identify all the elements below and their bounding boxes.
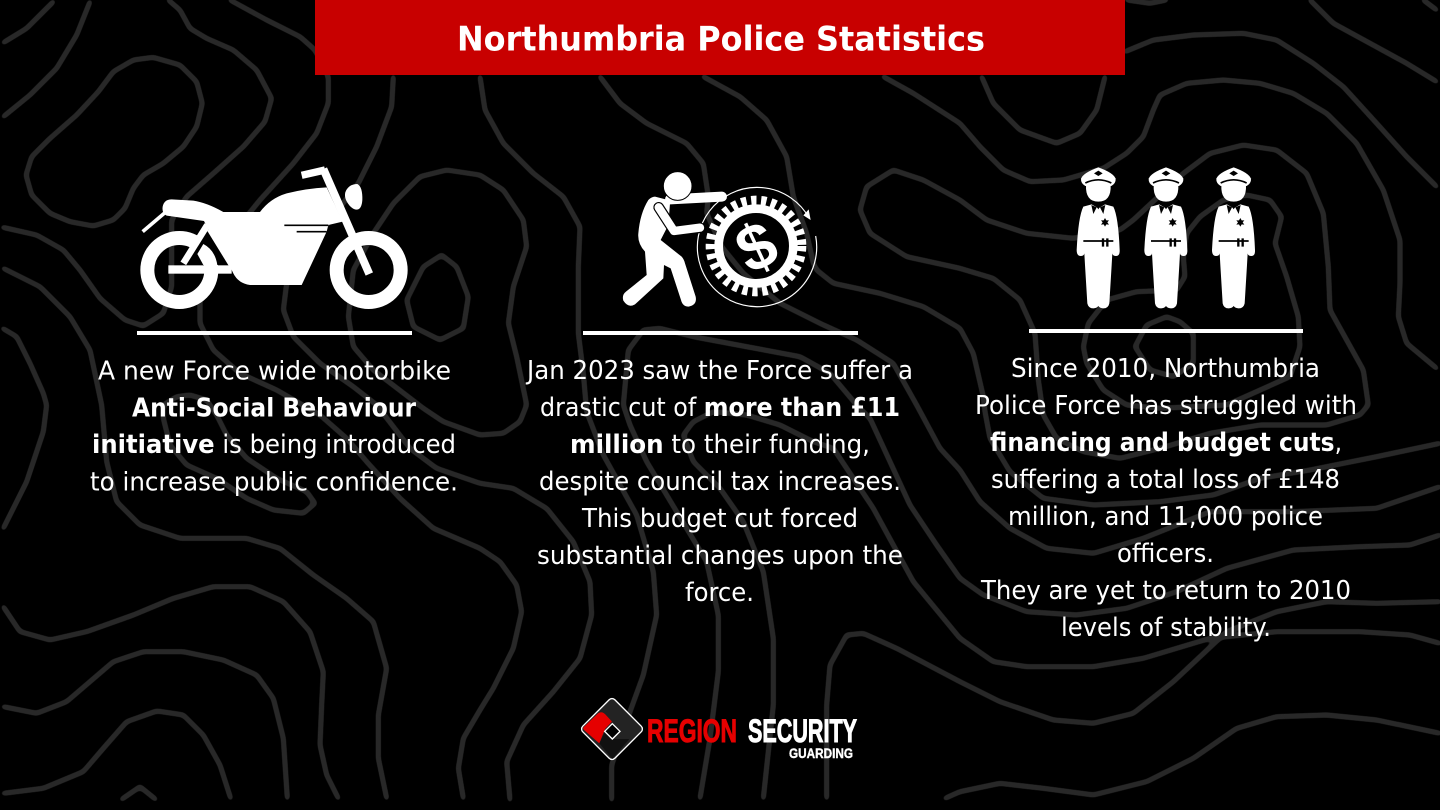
logo wordmark: SECURITY: [748, 713, 857, 749]
text block: column 3: Police Force has struggled with: [975, 391, 1357, 421]
text block: column 3: million, and 11,000 police: [1008, 502, 1323, 532]
text block: column 1: Anti-Social Behaviour: [132, 394, 416, 424]
text block: column 2: million to their funding,: [570, 430, 870, 460]
logo wordmark: GUARDING: [789, 745, 853, 761]
text block: column 2: force.: [685, 578, 754, 608]
logo wordmark: [647, 713, 857, 761]
logo wordmark: REGION: [647, 713, 737, 749]
arrowhead: [803, 209, 811, 220]
text block: column 3: Since 2010, Northumbria: [1011, 354, 1320, 384]
icon: three police officers: [1077, 167, 1255, 308]
icon: person pushing dollar gear: [623, 172, 817, 307]
divider: column 2: [583, 331, 858, 335]
text block: column 3: They are yet to return to 2010: [980, 576, 1351, 606]
text block: column 1: A new Force wide motorbike: [98, 356, 451, 386]
text block: column 1: initiative is being introduced: [92, 430, 456, 460]
divider: column 3: [1029, 329, 1303, 333]
text block: column 2: drastic cut of more than £11: [540, 393, 900, 423]
gear: [697, 187, 817, 307]
title banner: [315, 0, 1125, 75]
icon: motorbike: [143, 169, 401, 302]
text block: column 2: Jan 2023 saw the Force suffer a: [525, 356, 913, 386]
text block: column 1: [90, 356, 458, 498]
dollar sign: $: [725, 206, 788, 287]
logo: Region Security Guarding: [580, 697, 857, 761]
text block: column 3: suffering a total loss of £148: [991, 465, 1340, 495]
text block: column 3: officers.: [1117, 539, 1214, 569]
logo mark: [580, 697, 644, 761]
title text: Northumbria Police Statistics: [457, 20, 985, 58]
text block: column 3: financing and budget cuts,: [990, 428, 1342, 458]
text block: column 2: substantial changes upon the: [537, 541, 903, 571]
text block: column 1: to increase public confidence.: [90, 468, 458, 498]
text block: column 3: levels of stability.: [1061, 613, 1271, 643]
person: [623, 172, 722, 307]
text block: column 2: despite council tax increases.: [539, 467, 901, 497]
text block: column 3: [975, 354, 1357, 643]
divider: column 1: [137, 331, 412, 335]
text block: column 2: [525, 356, 913, 608]
text block: column 2: This budget cut forced: [581, 504, 858, 534]
